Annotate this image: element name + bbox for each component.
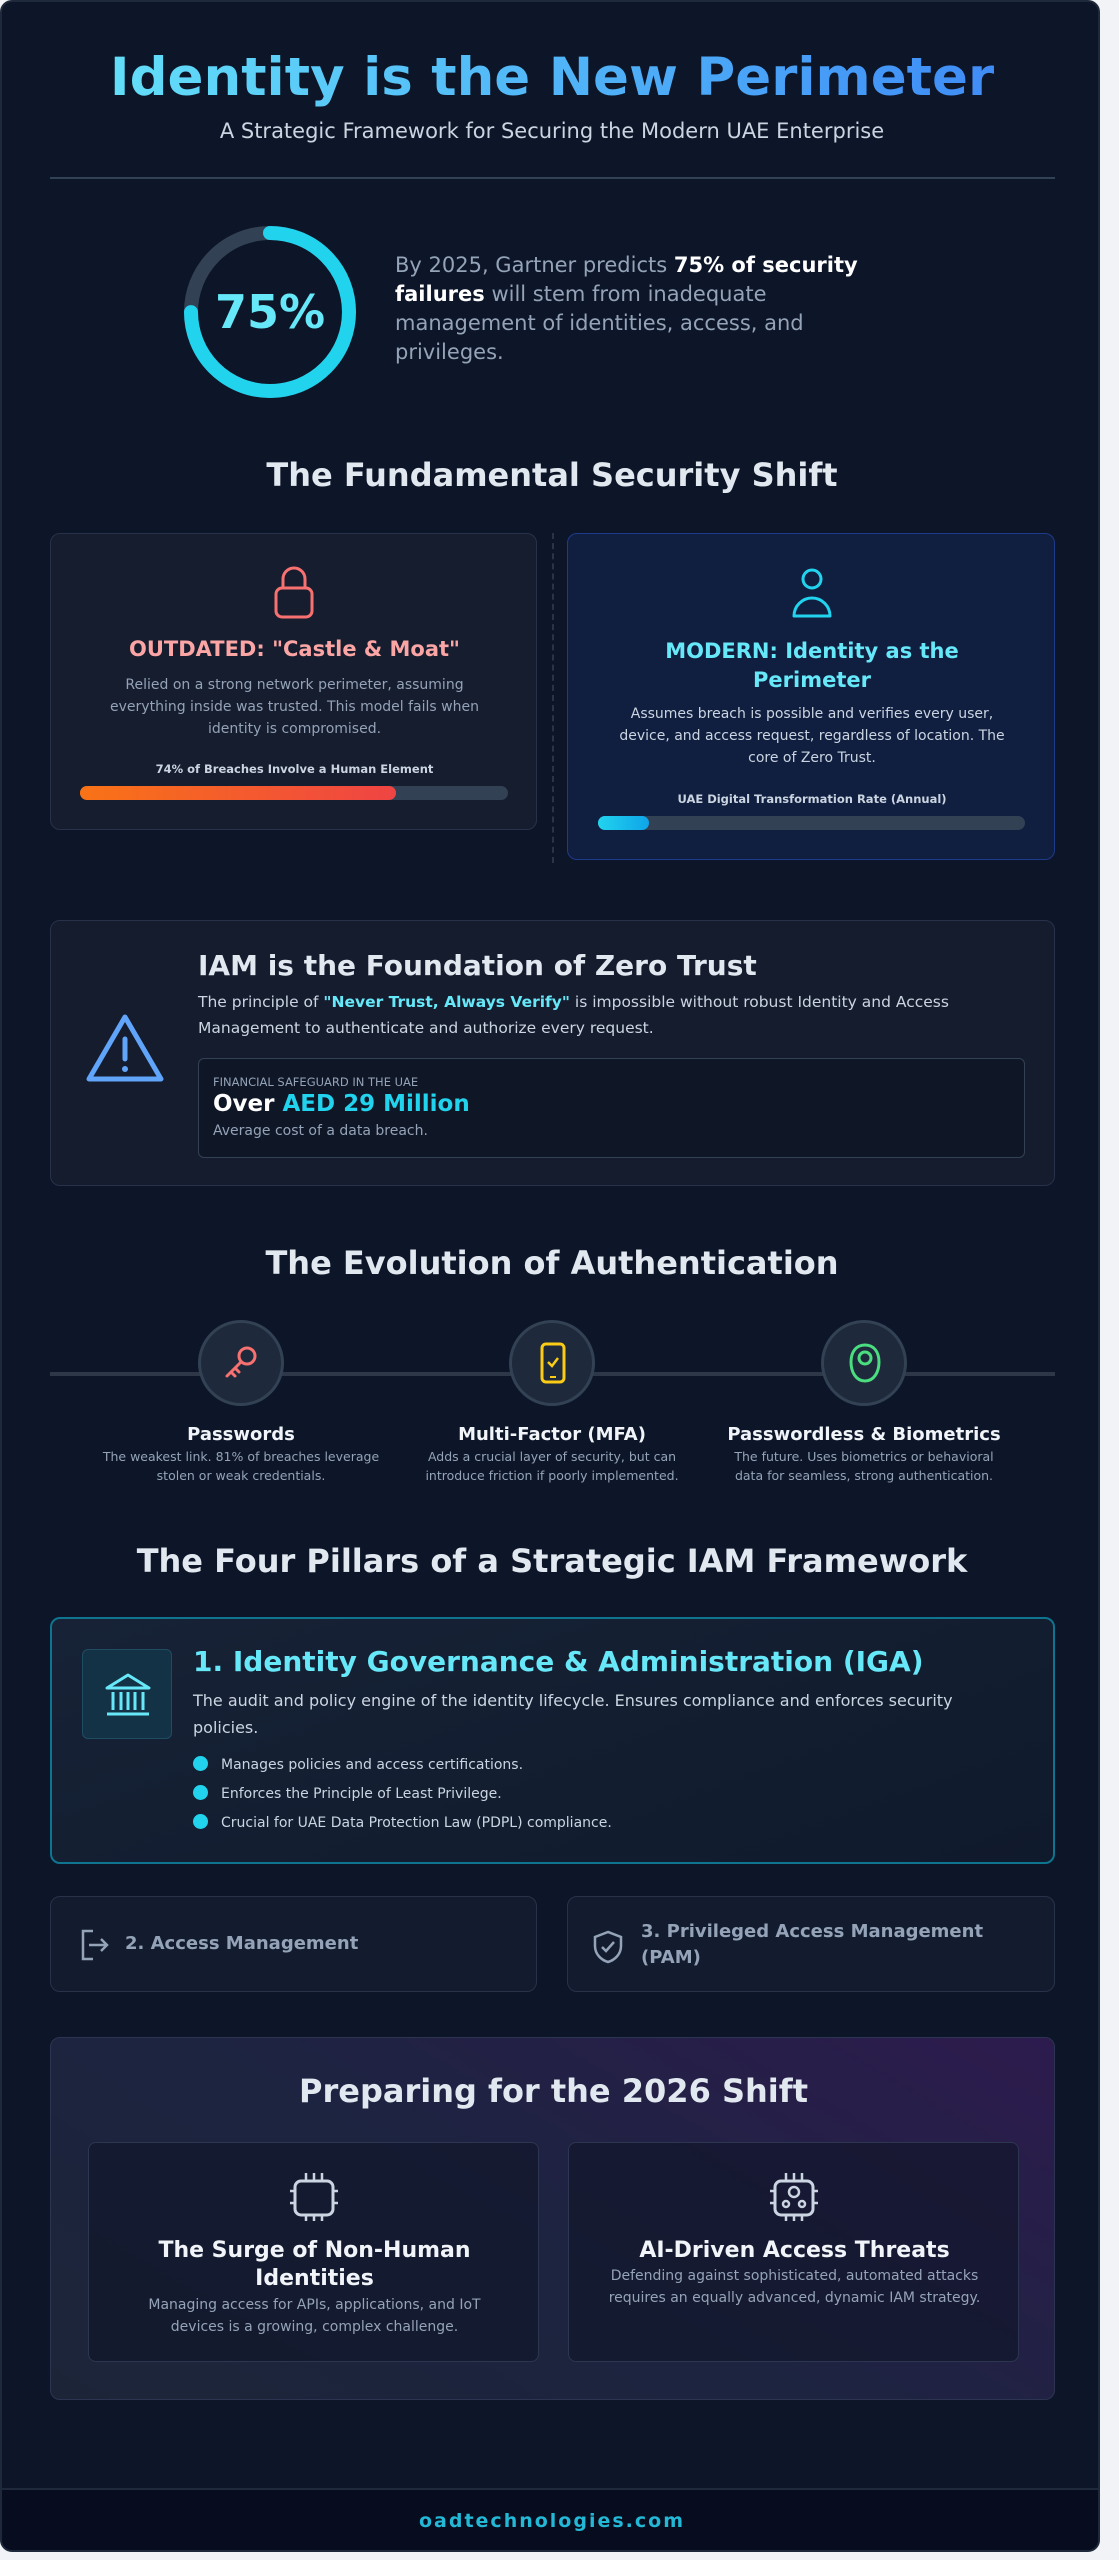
- step: passwords: The weakest link. 81% of breaches leverage stolen or weak credentials.: [103, 1449, 379, 1483]
- panel: PAM: 3. Privileged Access Management (PAM): [641, 1921, 983, 1968]
- card: non-human identities: [88, 2142, 539, 2362]
- heading: IAM: IAM is the Foundation of Zero Trust: [198, 949, 757, 982]
- footer: [2, 2488, 1102, 2554]
- checklist: Manages policies and access certifications.: [221, 1757, 523, 1773]
- panel: outdated: Relied on a strong network perimeter, assuming everything inside was trusted. This model fails when identity is compromised.: [110, 677, 479, 737]
- panel: IAM foundation: The principle of "Never Trust, Always Verify" is impossible without robust Identity and Access Management to authenticate and authorize every request.: [198, 993, 949, 1037]
- icon: lock: [274, 566, 314, 618]
- step: MFA: [425, 1320, 679, 1483]
- heading: four pillars: The Four Pillars of a Strategic IAM Framework: [137, 1542, 967, 1580]
- step: passwordless: [727, 1320, 1001, 1483]
- panel: modern: Assumes breach is possible and verifies every user, device, and access request, regardless of location. The core of Zero Trust.: [619, 706, 1005, 766]
- checklist: Crucial for UAE Data Protection Law (PDPL) compliance.: [221, 1815, 612, 1831]
- panel: 2026 shift: [50, 2037, 1055, 2400]
- panel: IGA: [50, 1617, 1055, 1864]
- heading: IGA: 1. Identity Governance & Administration (IGA): [193, 1645, 924, 1678]
- icon: user: [792, 568, 832, 618]
- callout: financial safeguard: [198, 1058, 1025, 1158]
- card: AI threats: AI-Driven Access Threats: [639, 2238, 950, 2263]
- bar: human element: [80, 762, 508, 800]
- panel: modern: [567, 533, 1055, 860]
- step: passwordless: Passwordless & Biometrics: [727, 1424, 1001, 1445]
- bar: digital transformation: UAE Digital Transformation Rate (Annual): [677, 792, 947, 806]
- stat text: By 2025, Gartner predicts 75% of security failures will stem from inadequate management of identities, access, and privileges.: [395, 253, 858, 364]
- step: passwordless: The future. Uses biometrics or behavioral data for seamless, strong authentication.: [734, 1449, 994, 1483]
- step: MFA: Adds a crucial layer of security, but can introduce friction if poorly implemented.: [425, 1449, 679, 1483]
- donut chart: 75%: [184, 226, 356, 398]
- donut chart: 75%: 75%: [215, 285, 325, 339]
- step: MFA: Multi-Factor (MFA): [458, 1424, 646, 1445]
- checklist: [193, 1756, 612, 1831]
- timeline: [50, 1320, 1055, 1483]
- bar: human element: 74% of Breaches Involve a Human Element: [156, 762, 433, 776]
- icon: bank: [82, 1649, 172, 1739]
- title: Identity is the New Perimeter: [110, 47, 994, 108]
- heading: 2026: Preparing for the 2026 Shift: [299, 2072, 808, 2110]
- heading: outdated: OUTDATED: "Castle & Moat": [129, 637, 460, 661]
- callout: financial safeguard: Average cost of a data breach.: [213, 1123, 428, 1139]
- card: non-human identities: Managing access for APIs, applications, and IoT devices is a growing, complex challenge.: [148, 2297, 481, 2335]
- callout: financial safeguard: Over AED 29 Million: [213, 1091, 470, 1117]
- step: passwords: Passwords: [187, 1424, 295, 1445]
- card: non-human identities: The Surge of Non-Human Identities: [158, 2238, 471, 2291]
- subtitle: A Strategic Framework for Securing the Modern UAE Enterprise: [220, 119, 884, 143]
- bar: digital transformation: [598, 792, 1025, 830]
- panel: outdated: [50, 533, 537, 830]
- callout: financial safeguard: FINANCIAL SAFEGUARD IN THE UAE: [213, 1075, 418, 1089]
- icon: warning: [86, 1014, 164, 1082]
- heading: evolution: The Evolution of Authentication: [265, 1244, 839, 1282]
- panel: PAM: [567, 1896, 1055, 1992]
- checklist: Enforces the Principle of Least Privilege.: [221, 1786, 502, 1802]
- heading: security shift: The Fundamental Security Shift: [266, 456, 838, 494]
- panel: access management: [50, 1896, 537, 1992]
- step: passwords: [102, 1320, 379, 1483]
- panel: IAM foundation: [50, 920, 1055, 1186]
- panel: IGA: The audit and policy engine of the identity lifecycle. Ensures compliance and enforces security policies.: [193, 1691, 953, 1737]
- panel: access management: 2. Access Management: [125, 1933, 358, 1954]
- footer: oadtechnologies.com: [419, 2510, 685, 2532]
- card: AI threats: [568, 2142, 1019, 2362]
- card: AI threats: Defending against sophisticated, automated attacks requires an equally advanced, dynamic IAM strategy.: [609, 2268, 980, 2306]
- heading: modern: MODERN: Identity as the Perimeter: [665, 639, 959, 692]
